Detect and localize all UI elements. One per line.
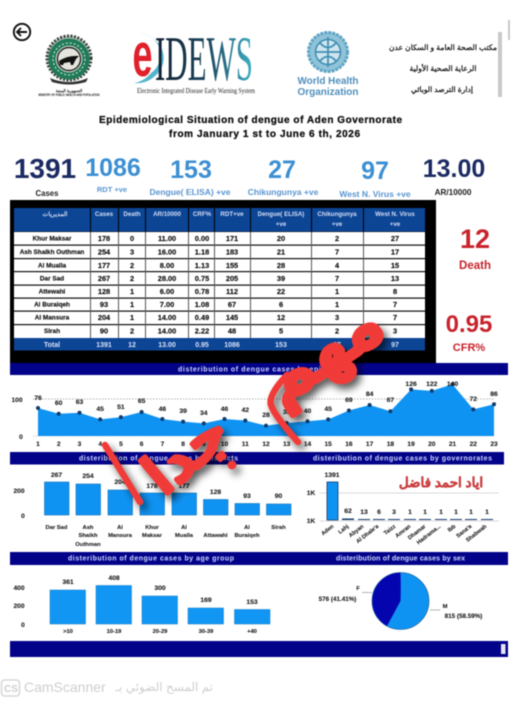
- table rows: 15: [391, 261, 399, 270]
- chart: cases by governorate: 1K: [307, 490, 315, 497]
- title: [99, 115, 402, 140]
- chart: cases by district: Mualla: [175, 533, 194, 539]
- KPI: CFR: [446, 311, 492, 354]
- logo: World Health Organization: World Health: [298, 75, 358, 87]
- heading band: age group and sex: disteribution of dengue cases by sex: [336, 556, 465, 562]
- panel: district table: [10, 200, 436, 363]
- chart: cases by epi week: 84: [366, 391, 374, 398]
- chart: cases by epi week: 1: [36, 441, 40, 448]
- table rows: 6: [279, 300, 283, 309]
- table rows: 13: [391, 274, 399, 283]
- chart: cases by district: 177: [178, 483, 190, 490]
- table rows: 0.49: [195, 313, 209, 322]
- KPI: RDT: RDT +ve: [97, 185, 127, 194]
- chart: cases by epi week: 20: [428, 441, 436, 448]
- chart: cases by epi week: 23: [490, 441, 498, 448]
- table rows: 2: [130, 261, 134, 270]
- table rows: [14, 232, 425, 338]
- table rows: 1: [130, 300, 134, 309]
- table rows: Al Buraiqeh: [34, 302, 70, 308]
- table total row: 0.95: [195, 342, 209, 349]
- chart: cases by district: Al: [244, 525, 250, 531]
- table rows: Al Mansura: [35, 314, 70, 322]
- table rows: 128: [98, 287, 110, 296]
- chart: cases by epi week: 22: [470, 441, 477, 448]
- logo: ministry emblem: [38, 36, 100, 97]
- chart: cases by age group: 408: [108, 575, 120, 582]
- table rows: 7: [335, 248, 339, 256]
- table header: +ve: [276, 221, 287, 228]
- chart: cases by age group: 30-39: [199, 629, 214, 635]
- chart: cases by governorate: 13: [360, 509, 368, 516]
- KPI: Chikungunya: Chikungunya +ve: [248, 187, 319, 197]
- KPI: West Nile virus: [339, 157, 411, 199]
- text: Arabic department names: [389, 43, 497, 95]
- chart: cases by epi week: 13: [283, 441, 291, 448]
- KPI: cases: [14, 153, 76, 198]
- chart: cases by epi week: 28: [262, 412, 270, 419]
- KPI: Dengue ELISA: [149, 156, 231, 197]
- chart: cases by district: Outhman: [75, 542, 101, 548]
- table rows: 1.08: [195, 300, 209, 309]
- chart: cases by sex pie: M: [443, 604, 448, 610]
- table rows: Attewahi: [39, 288, 66, 296]
- logo: ministry emblem: الجمهورية اليمنية: [56, 88, 82, 94]
- chart: cases by district: Al: [181, 525, 187, 531]
- chart: cases by age group: 300: [154, 585, 166, 592]
- table total row: 27: [333, 342, 341, 349]
- table rows: 0: [130, 234, 134, 243]
- table rows: Ash Shaikh Outhman: [20, 249, 84, 256]
- chart: cases by epi week: 69: [345, 397, 353, 404]
- table rows: 7: [393, 300, 397, 309]
- table rows: 0.00: [195, 234, 209, 243]
- table rows: 8: [393, 287, 397, 296]
- watermark: CamScanner: CS: [4, 684, 18, 695]
- chart: cases by epi week: 67: [387, 397, 394, 404]
- table rows: 155: [226, 261, 238, 270]
- chart: cases by district: 267: [51, 472, 62, 479]
- chart: cases by district: [13, 472, 291, 548]
- table header: RDT+ve: [220, 211, 244, 218]
- chart: cases by epi week: 5: [119, 441, 123, 448]
- table header: Dengue( ELISA): [258, 211, 304, 218]
- table rows: 3: [393, 326, 397, 336]
- chart: cases by age group: >10: [63, 629, 73, 635]
- chart: cases by epi week: 2: [57, 441, 61, 448]
- heading band: age group and sex: [10, 552, 508, 565]
- chart: cases by district: Khur: [145, 525, 160, 531]
- chart: cases by district: 178: [146, 483, 158, 490]
- chart: cases by epi week: 76: [34, 395, 42, 402]
- chart: cases by governorate: Amran: [395, 523, 413, 539]
- heading band: age group and sex: disteribution of dengue cases by age group: [68, 556, 234, 562]
- title: Epidemiological Situation of dengue of Aden Governorate: [99, 115, 402, 126]
- logo: eIDEWS: Electronic Integrated Disease Early Warning System: [137, 87, 255, 95]
- table total row: 97: [391, 342, 399, 349]
- chart: cases by epi week: 42: [242, 407, 249, 414]
- chart: cases by governorate: 3: [392, 509, 396, 516]
- chart: cases by epi week: 72: [470, 396, 477, 403]
- chart: cases by epi week: 21: [449, 441, 456, 448]
- chart: cases by epi week: 9: [202, 441, 206, 448]
- scrollbar: [498, 20, 510, 97]
- chart: cases by epi week: 11: [242, 441, 249, 448]
- table rows: 3: [335, 313, 339, 322]
- chart: cases by district: Attawahi: [203, 533, 228, 539]
- KPI: CFR: 0.95: [446, 311, 492, 338]
- table header: AR/10000: [153, 211, 181, 218]
- table rows: 183: [226, 248, 238, 256]
- chart: cases by governorate: Lahj: [337, 524, 351, 536]
- logo: eIDEWS: [132, 20, 255, 95]
- watermark: CamScanner: تم المسح الضوئي بـ: [114, 680, 213, 694]
- table total row: 13.00: [158, 342, 176, 349]
- chart: cases by epi week: 3: [78, 441, 82, 448]
- table rows: 4: [335, 261, 340, 270]
- table header: [14, 208, 425, 232]
- chart: cases by governorate: 1: [408, 509, 412, 516]
- title: from January 1 st to June 6 th, 2026: [169, 129, 360, 140]
- chart: cases by district: 204: [114, 479, 126, 486]
- chart: cases by epi week: 12: [262, 441, 270, 448]
- table rows: 7: [335, 274, 339, 283]
- chart: cases by district: Mansura: [108, 533, 133, 539]
- heading band: epi week: [10, 363, 508, 375]
- table rows: 17: [391, 248, 399, 256]
- table header: +ve: [332, 221, 343, 228]
- KPI: Chikungunya: [248, 156, 319, 197]
- chart: cases by age group: +40: [247, 629, 257, 635]
- chart: cases by governorate: Taizz: [383, 524, 397, 537]
- table rows: 5: [279, 326, 283, 336]
- chart: cases by age group: 200: [13, 603, 25, 610]
- chart: cases by governorate: 6: [377, 509, 381, 516]
- chart: cases by epi week: 45: [96, 406, 104, 413]
- chart: cases by epi week: 63: [76, 399, 83, 406]
- table rows: 2.22: [195, 326, 209, 336]
- chart: cases by governorate: [307, 472, 499, 546]
- table header: +ve: [390, 221, 401, 228]
- chart: cases by epi week: 46: [221, 406, 228, 413]
- table rows: 2: [335, 234, 339, 243]
- chart: cases by district: 0: [21, 513, 25, 520]
- table rows: 1: [335, 287, 339, 296]
- table rows: 0.78: [195, 287, 209, 296]
- watermark: CamScanner: CamScanner: [24, 679, 106, 695]
- table rows: 39: [277, 274, 285, 283]
- table total row: Total: [44, 342, 60, 349]
- KPI: Dengue ELISA: Dengue( ELISA) +ve: [149, 187, 231, 197]
- chart: cases by age group: 153: [246, 599, 258, 606]
- table header: Cases: [95, 211, 114, 218]
- table rows: Dar Sad: [40, 276, 64, 282]
- KPI: Dengue ELISA: 153: [170, 156, 212, 184]
- chart: cases by district: Maksar: [142, 533, 163, 539]
- chart: cases by epi week: 8: [181, 441, 185, 448]
- table rows: 7.00: [160, 300, 174, 309]
- chart: cases by governorate: 1K: [307, 518, 315, 525]
- chart: cases by epi week: 7: [161, 441, 165, 448]
- chart: cases by age group: 0: [21, 622, 25, 629]
- chart: cases by governorate: Shabwah: [465, 523, 489, 544]
- table rows: 28: [277, 261, 285, 270]
- chart: cases by epi week: 17: [366, 441, 374, 448]
- table rows: Al Mualla: [38, 262, 66, 270]
- KPI: cases: Cases: [36, 189, 59, 198]
- chart: cases by sex pie: F: [356, 586, 360, 592]
- chart: cases by epi week: 51: [117, 404, 125, 411]
- table rows: 8.00: [160, 261, 174, 270]
- chart: cases by district: Sirah: [271, 525, 286, 531]
- text: Arabic department names: مكتب الصحة العامة و السكان عدن: [389, 43, 497, 53]
- table rows: 27: [391, 234, 399, 243]
- chart: cases by epi week: [11, 381, 498, 448]
- table total row: [14, 338, 425, 350]
- table total row: 153: [275, 342, 287, 349]
- logo: eIDEWS: e: [132, 20, 153, 89]
- KPI: deaths: [459, 224, 491, 272]
- footer band: [10, 641, 508, 657]
- table rows: Khur Maksar: [33, 236, 72, 242]
- table rows: 177: [98, 261, 110, 270]
- KPI: attack rate: [423, 155, 485, 197]
- table rows: 67: [228, 300, 236, 309]
- logo: ministry emblem: MINISTRY OF PUBLIC HEALTH AND POPULATION: [38, 93, 100, 97]
- chart: cases by sex pie: [319, 572, 482, 630]
- chart: cases by epi week: 45: [324, 406, 332, 413]
- table rows: 28.00: [158, 274, 176, 283]
- chart: cases by epi week: 100: [11, 397, 23, 404]
- table rows: 267: [98, 274, 110, 283]
- table rows: 1.13: [195, 261, 209, 270]
- KPI: deaths: 12: [460, 224, 490, 254]
- table total row: 12: [128, 342, 136, 349]
- logo: World Health Organization: [298, 32, 358, 98]
- chart: cases by district: 128: [210, 489, 221, 496]
- table header: المديريات: [42, 211, 68, 218]
- chart: cases by epi week: 34: [200, 410, 208, 417]
- table header: West N. Virus: [375, 211, 415, 218]
- table total row: 1086: [224, 342, 240, 349]
- chart: cases by age group: 20-29: [153, 629, 168, 635]
- table header: Death: [123, 211, 141, 218]
- table rows: 14.00: [158, 313, 176, 322]
- table total row: 1391: [96, 342, 112, 349]
- watermark: CamScanner: [2, 679, 213, 696]
- table rows: 14.00: [158, 326, 176, 336]
- chart: cases by epi week: 40: [304, 408, 311, 415]
- chart: cases by epi week: 16: [345, 441, 353, 448]
- chart: cases by district: 254: [82, 473, 94, 480]
- chart: cases by epi week: 60: [55, 400, 63, 407]
- table rows: 3: [130, 248, 134, 256]
- chart: cases by governorate: 1: [439, 509, 443, 516]
- text: author name: اياد احمد فاضل: [399, 475, 483, 490]
- chart: cases by epi week: 4: [98, 441, 102, 448]
- chart: cases by age group: 169: [200, 597, 212, 604]
- table rows: Sirah: [44, 328, 60, 335]
- KPI: West Nile virus: 97: [361, 157, 389, 185]
- chart: cases by governorate: 1: [423, 509, 427, 516]
- chart: cases by governorate: Hadrama...: [416, 524, 443, 546]
- table rows: 11.00: [158, 234, 176, 243]
- chart: cases by governorate: 1: [454, 509, 458, 516]
- icon: back arrow: [14, 24, 30, 40]
- chart: cases by governorate: Dhamar: [407, 523, 428, 541]
- handwritten red annotation: جدا: [130, 399, 241, 506]
- table rows: 0.75: [195, 274, 209, 283]
- text: Arabic department names: إدارة الترصد الوبائي: [411, 85, 473, 95]
- chart: cases by epi week: 39: [179, 408, 187, 415]
- chart: cases by age group: 361: [62, 579, 74, 586]
- chart: cases by governorate: Sana'a: [456, 523, 474, 540]
- table rows: 171: [226, 234, 238, 243]
- KPI: cases: 1391: [14, 153, 76, 184]
- table rows: 20: [277, 234, 285, 243]
- chart: cases by epi week: 0: [19, 434, 23, 441]
- heading band: districts and governorates: [10, 452, 504, 464]
- handwritten red annotation: مهم: [248, 285, 398, 420]
- table rows: 93: [100, 300, 108, 309]
- chart: cases by epi week: 6: [140, 441, 144, 448]
- chart: cases by governorate: Abyan: [348, 523, 366, 539]
- table rows: 2: [335, 326, 339, 336]
- table rows: 205: [226, 274, 238, 283]
- table header: Chikungunya: [317, 211, 357, 218]
- chart: cases by sex pie: 815 (58.59%): [445, 613, 482, 620]
- chart: cases by epi week: 46: [159, 406, 166, 413]
- chart: cases by district: Ash: [83, 525, 94, 531]
- chart: cases by epi week: 18: [387, 441, 394, 448]
- KPI: RDT: 1086: [85, 154, 141, 182]
- table header: CRF%: [193, 211, 212, 218]
- chart: cases by epi week: 15: [325, 441, 332, 448]
- KPI: attack rate: AR/10000: [435, 188, 472, 197]
- table rows: 6.00: [160, 287, 174, 296]
- table rows: 2: [130, 274, 134, 283]
- chart: cases by governorate: 62: [344, 508, 352, 515]
- table rows: 12: [277, 313, 285, 322]
- handwritten red annotation: [105, 285, 398, 506]
- text: Arabic department names: الرعاية الصحية الأولية: [410, 62, 476, 74]
- chart: cases by district: Dar Sad: [46, 525, 68, 531]
- chart: cases by governorate: 1391: [324, 472, 340, 479]
- table rows: 204: [98, 313, 111, 322]
- chart: cases by epi week: 14: [304, 441, 311, 448]
- KPI: West Nile virus: West N. Virus +ve: [339, 189, 411, 199]
- table rows: 1: [335, 300, 339, 309]
- chart: cases by district: Shaikh: [78, 533, 98, 539]
- heading band: epi week: disteribution of dengue cases by epi week: [178, 366, 343, 374]
- table rows: 21: [277, 248, 285, 256]
- chart: cases by epi week: 35: [283, 409, 291, 416]
- logo: eIDEWS: IDEWS: [155, 24, 253, 94]
- table rows: 90: [100, 326, 108, 336]
- table rows: 16.00: [158, 248, 176, 256]
- chart: cases by epi week: 126: [405, 381, 417, 388]
- logo: World Health Organization: Organization: [298, 86, 358, 98]
- table rows: 2: [130, 326, 134, 336]
- table rows: 1: [130, 287, 134, 296]
- chart: cases by governorate: Aden: [321, 523, 336, 537]
- table rows: 1: [130, 313, 134, 322]
- chart: cases by epi week: 86: [490, 391, 498, 398]
- chart: cases by governorate: 1: [485, 509, 489, 516]
- chart: cases by epi week: 140: [447, 381, 458, 388]
- chart: cases by district: Buraiqeh: [234, 533, 260, 539]
- KPI: CFR: CFR%: [453, 342, 485, 354]
- table rows: 7: [393, 313, 397, 322]
- chart: cases by age group: 10-19: [107, 629, 122, 635]
- chart: cases by governorate: 1: [469, 509, 473, 516]
- chart: cases by district: 200: [13, 488, 25, 495]
- chart: cases by epi week: 122: [426, 381, 438, 388]
- chart: cases by sex pie: 576 (41.41%): [319, 596, 356, 603]
- chart: cases by age group: 400: [13, 585, 25, 592]
- chart: cases by epi week: 65: [138, 398, 146, 405]
- heading band: districts and governorates: disteribution of dengue cases by governorates: [313, 456, 492, 462]
- chart: cases by epi week: 19: [407, 441, 415, 448]
- table rows: 48: [228, 326, 236, 336]
- chart: cases by governorate: Ibb: [447, 523, 458, 534]
- KPI: Chikungunya: 27: [268, 156, 296, 184]
- chart: cases by governorate: Al Dhale'a: [355, 523, 381, 545]
- chart: cases by district: Al: [117, 525, 123, 531]
- table rows: 22: [277, 287, 285, 296]
- table rows: 254: [98, 248, 111, 256]
- chart: cases by epi week: 10: [221, 441, 228, 448]
- table rows: 145: [226, 313, 238, 322]
- KPI: attack rate: 13.00: [423, 155, 485, 183]
- table rows: 178: [98, 234, 110, 243]
- heading band: districts and governorates: disteribution of dengue cases by districts: [79, 456, 238, 462]
- chart: cases by age group: [13, 575, 270, 635]
- table rows: 112: [226, 287, 238, 296]
- chart: cases by district: 90: [275, 493, 282, 500]
- chart: cases by district: 93: [243, 493, 251, 500]
- table rows: 1.18: [195, 248, 209, 256]
- KPI: deaths: Death: [459, 260, 491, 272]
